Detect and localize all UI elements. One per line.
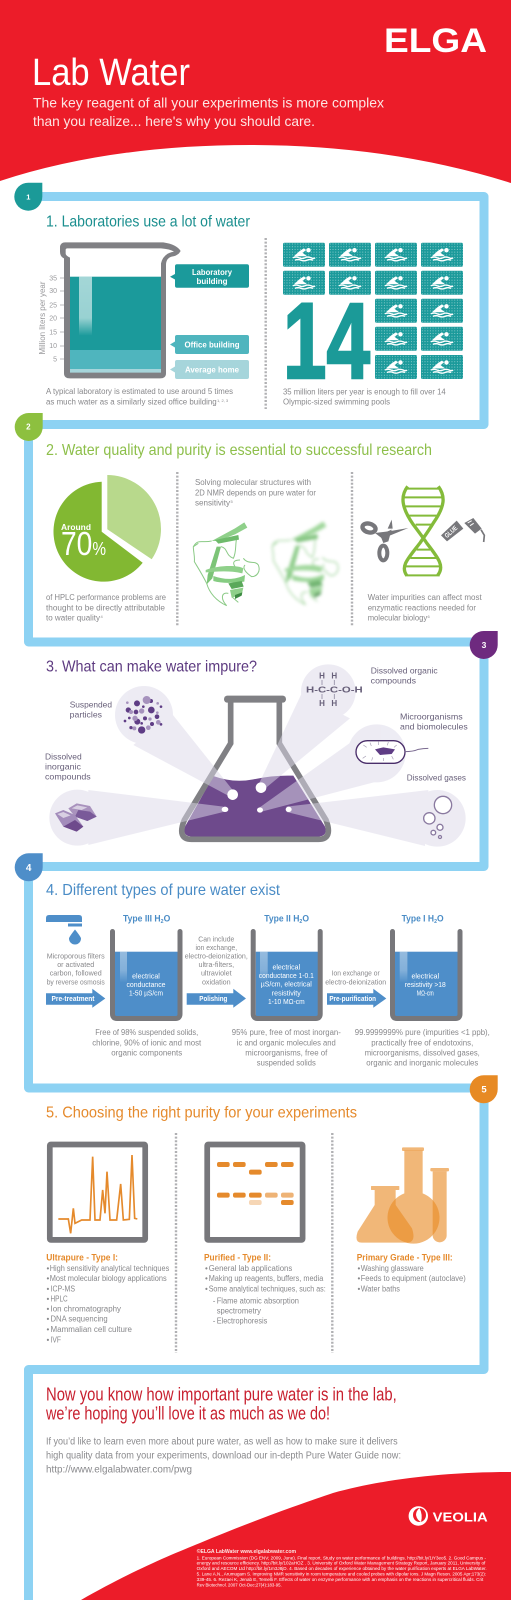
beaker: Type III: 1-50 µS/cm [129, 989, 163, 998]
list: purified: Making up reagents, buffers, media [209, 1274, 324, 1283]
subtitle [33, 95, 384, 129]
arrow: pre-purification [327, 989, 386, 1008]
icon: crystals [55, 803, 97, 832]
caption: HPLC: 4 [100, 614, 104, 619]
list: ultrapure: • [46, 1325, 50, 1334]
caption: Type II: microorganisms, free of [245, 1049, 328, 1058]
list: ultrapure: • [46, 1335, 50, 1344]
beaker: Type II: electrical [272, 963, 300, 972]
closing heading [45, 1385, 397, 1423]
footnotes: 339-45. 6. Rezaei K, Jenab E, Temelli F. Effects of water on enzyme performance with an emphasis on the reactions in supercritical fluids. Crit [197, 1577, 484, 1582]
caption: Type III [92, 1028, 202, 1058]
label: dissolved gases: Dissolved gases [407, 773, 466, 783]
chart: beaker: 25 [49, 302, 57, 310]
text: pre-treatment note: Microporous filters [47, 951, 105, 960]
illustration: sharp protein [193, 522, 259, 606]
closing paragraph: http://www.elgalabwater.com/pwg [46, 1465, 192, 1476]
caption: NMR: 2D NMR depends on pure water for [195, 488, 316, 497]
caption: Type I: organic and inorganic molecules [366, 1058, 478, 1068]
beaker: Type III: conductance [126, 980, 166, 989]
icon: gel electrophoresis [207, 1144, 303, 1240]
list: ultrapure: ICP-MS [50, 1284, 75, 1293]
callout: laboratory building [170, 264, 249, 288]
label: suspended particles: particles [70, 710, 102, 720]
caption: Type II [232, 1028, 341, 1068]
arrow: pre-treatment: Pre-treatment [52, 994, 95, 1003]
text: polishing note: electro-deionization, [185, 951, 248, 960]
list: ultrapure: • [46, 1315, 50, 1324]
icon: chemical formula: H [331, 699, 337, 708]
big number 14: 14 [283, 280, 370, 401]
header: red banner [0, 0, 511, 183]
caption: pools: Olympic-sized swimming pools [283, 398, 390, 407]
list: purified: - [213, 1296, 216, 1305]
caption: NMR [195, 478, 316, 508]
beaker: Type III [112, 914, 180, 1018]
label: microorganisms: and biomolecules [400, 721, 468, 731]
badge 4 [15, 853, 43, 881]
beaker: Type II: Type II H [264, 914, 301, 924]
text: polishing note [185, 934, 248, 986]
caption: Type II: ic and organic molecules and [237, 1038, 336, 1047]
text: polishing note: ultra-filters, [198, 960, 234, 969]
icon: chemical formula: H [319, 671, 325, 680]
panel: closing message [45, 1385, 401, 1476]
caption: HPLC: thought to be directly attributable [46, 603, 166, 612]
list: ultrapure: • [46, 1305, 50, 1314]
icon: DNA with scissors and glue [361, 486, 484, 575]
closing heading: Now you know how important pure water is in the lab, [46, 1385, 397, 1405]
caption: Type III: organic components [111, 1049, 182, 1058]
list: purified: Flame atomic absorption [217, 1296, 299, 1305]
icon: bacterium [356, 741, 428, 763]
footnotes [197, 1548, 487, 1588]
caption: Type I: 99.9999999% pure (impurities <1 ppb), [355, 1028, 490, 1037]
beaker: Type II: resistivity [272, 988, 301, 997]
logo: ELGA: ELGA [384, 22, 487, 60]
icon: bubbles [424, 796, 452, 838]
pie chart: 70%: 70% [61, 525, 106, 562]
list: ultrapure: • [46, 1294, 50, 1303]
beaker: Type I [392, 914, 460, 1018]
footnotes: 5. Lane A.N., Arumugam S. Improving NMR sensitivity in room temperature and cooled probes with dipolar ions. J Magn Reson. 2005 Apr;173(2): [197, 1572, 486, 1577]
text: polishing note: oxidation [202, 977, 231, 986]
text: pre-purification note [325, 969, 386, 986]
caption: enzymatic: Water impurities can affect most [368, 593, 482, 602]
beaker: Type II: 2 [299, 919, 302, 925]
label: suspended particles [70, 699, 112, 720]
badge 5 [470, 1075, 498, 1103]
list: purified: • [205, 1274, 208, 1283]
arrow: polishing: Polishing [199, 994, 228, 1003]
chart: beaker [38, 242, 181, 378]
text: pre-treatment note: carbon, followed [50, 969, 102, 978]
caption: lab usage: 1, 2, 3 [217, 398, 229, 403]
caption: Type I: microorganisms, dissolved gases, [365, 1049, 480, 1058]
beaker: Type I: resistivity >18 [405, 980, 446, 989]
beaker: Type II: 1-10 MΩ-cm [268, 997, 305, 1006]
list: primary grade: • [358, 1284, 360, 1293]
list: primary grade: Water baths [361, 1284, 400, 1293]
panel: section 2 [46, 442, 484, 626]
badge 2 [15, 413, 43, 441]
chart: beaker: 35 [49, 276, 57, 282]
logo: Veolia: VEOLIA [433, 1510, 488, 1525]
callout: laboratory building: building [196, 277, 228, 286]
caption: Type III: Free of 98% suspended solids, [95, 1028, 198, 1037]
footnotes: ©ELGA LabWater www.elgalabwater.com [197, 1548, 296, 1555]
beaker: Type II: conductance 1-0.1 [259, 971, 314, 980]
list: primary grade: Washing glassware [361, 1264, 424, 1273]
caption: pools: 35 million liters per year is enough to fill over 14 [283, 387, 446, 396]
badge 1 [14, 183, 42, 211]
chart: beaker: 10 [49, 343, 57, 350]
list: purified: • [205, 1284, 208, 1293]
list: purified: • [205, 1264, 208, 1273]
label: microorganisms: Microorganisms [400, 711, 463, 721]
callout: office building: Office building [184, 340, 240, 349]
badge 4: 4 [26, 863, 32, 874]
footnotes: 1. European Commission (DG ENV; 2009, June). Final report. Study on water performance of buildings. http://bit.ly/1iY3eo5. 2. Good Campus - [197, 1555, 487, 1560]
caption: lab usage [46, 387, 233, 406]
beaker: Type III: 2 [161, 919, 164, 925]
subtitle: than you realize... here's why you should care. [33, 113, 315, 129]
icon: chemical formula: H [319, 699, 325, 708]
list: ultrapure: IVF [50, 1335, 61, 1344]
list: ultrapure: • [46, 1284, 50, 1293]
heading 4: 4. Different types of pure water exist [46, 882, 281, 899]
caption: lab usage: as much water as a similarly sized office building [46, 397, 217, 406]
icon: tap [46, 915, 82, 944]
list: ultrapure: High sensitivity analytical techniques [50, 1264, 169, 1273]
pie chart: 70%: Around [61, 522, 91, 532]
subtitle: The key reagent of all your experiments is more complex [33, 95, 384, 111]
illustration: flask with beams [49, 664, 466, 847]
footnotes: energy and resource efficiency. http://bit.ly/102aHOZ . 3. University of Oxford Water Management Strategy Report, January 2011, University of [197, 1561, 486, 1566]
label: organic compounds: Dissolved organic [371, 665, 438, 675]
footnotes: Oxford and AECOM Ltd http://bit.ly/1m3J8jD. 4. Based on decades of experience obtained by the water purification experts at ELGA LabWater. [197, 1566, 487, 1571]
list: ultrapure: Ultrapure - Type I: [46, 1253, 118, 1263]
caption: Type I [355, 1028, 490, 1068]
list: purified: - [213, 1317, 216, 1326]
logo: Veolia [409, 1506, 488, 1526]
frame: light blue connector [28, 196, 484, 1600]
beaker: Type I: MΩ-cm [417, 989, 434, 998]
arrow: pre-purification: Pre-purification [329, 994, 376, 1003]
text: pre-treatment note: or activated [57, 960, 94, 969]
icon: glassware [356, 1147, 449, 1244]
beaker: Type I: Type I H [402, 914, 436, 924]
text: polishing note: Can include [198, 934, 234, 943]
list: primary grade: Primary Grade - Type III: [357, 1253, 453, 1263]
badge 1: 1 [26, 192, 30, 202]
caption: HPLC [46, 593, 167, 623]
icon: suspended particles [124, 696, 162, 733]
label: organic compounds [371, 665, 438, 685]
text: pre-treatment note: by reverse osmosis [47, 977, 105, 986]
arrow: pre-treatment [46, 989, 105, 1008]
closing paragraph: If you’d like to learn even more about pure water, as well as how to make sure it delivers [46, 1436, 398, 1447]
list: purified [204, 1253, 326, 1326]
icon: DNA with scissors and glue: GLUE [444, 525, 460, 540]
caption: NMR: Solving molecular structures with [195, 478, 311, 487]
caption: HPLC: of HPLC performance problems are [46, 593, 167, 602]
caption: enzymatic: enzymatic reactions needed for [368, 603, 476, 612]
footnotes: Rev Biotechnol. 2007 Oct-Dec;27(4):183-95. [197, 1583, 282, 1588]
caption: NMR: 5 [230, 499, 234, 504]
arrow: polishing [187, 989, 246, 1008]
caption: enzymatic: molecular biology [368, 614, 427, 623]
beaker: Type II [253, 914, 320, 1018]
callout: average home: Average home [185, 366, 240, 375]
badge 2: 2 [26, 422, 31, 432]
list: ultrapure: DNA sequencing [50, 1315, 108, 1324]
caption: Type III: chlorine, 90% of ionic and most [92, 1038, 202, 1047]
callout: average home [170, 360, 249, 379]
pie chart: 70% [53, 475, 161, 582]
list: purified: General lab applications [209, 1264, 292, 1273]
closing heading: we’re hoping you’ll love it as much as we do! [45, 1403, 330, 1423]
caption: Type II: suspended solids [257, 1058, 316, 1068]
label: organic compounds: compounds [371, 675, 416, 685]
list: ultrapure: • [46, 1264, 50, 1273]
closing paragraph: high quality data from your experiments, download our in-depth Pure Water Guide now: [46, 1451, 401, 1462]
chart: beaker: Million liters per year [38, 281, 47, 354]
caption: enzymatic: 6 [428, 614, 430, 619]
panel: section 3 [45, 659, 468, 847]
beaker: Type III: O [164, 914, 170, 924]
icon: chemical formula [306, 671, 363, 708]
text: pre-treatment note [47, 951, 105, 986]
list: purified: Purified - Type II: [204, 1253, 271, 1263]
icon: chemical formula: H [331, 671, 337, 680]
beaker: Type III: Type III H [123, 914, 162, 924]
text: pre-purification note: electro-deionization [325, 977, 386, 986]
label: inorganic compounds [45, 751, 91, 781]
beaker: Type I: O [437, 914, 444, 924]
chart: beaker: 30 [49, 288, 57, 295]
list: ultrapure: HPLC [50, 1294, 68, 1303]
chart: beaker: 15 [49, 330, 57, 336]
beaker: Type I: 2 [434, 919, 437, 925]
icons: swimming pools [283, 243, 463, 379]
label: inorganic compounds: inorganic [45, 762, 82, 772]
closing paragraph [46, 1436, 401, 1476]
list: ultrapure [46, 1253, 169, 1344]
callout: laboratory building: Laboratory [192, 268, 233, 277]
label: suspended particles: Suspended [70, 699, 112, 709]
heading 1: 1. Laboratories use a lot of water [46, 214, 251, 231]
badge 3: 3 [482, 640, 487, 650]
footer: red banner [81, 1472, 511, 1600]
chart: beaker: 5 [53, 356, 57, 364]
list: primary grade: • [358, 1274, 360, 1283]
list: purified: Electrophoresis [217, 1317, 267, 1326]
heading 5: 5. Choosing the right purity for your experiments [46, 1105, 357, 1122]
caption: NMR: sensitivity [195, 498, 230, 508]
panel: section 4 [46, 882, 490, 1068]
icon: chromatogram [50, 1144, 145, 1240]
list: ultrapure: • [46, 1274, 50, 1283]
beaker: Type I: electrical [411, 971, 439, 980]
panel: section 1 [38, 214, 463, 409]
illustration: blurred protein [272, 521, 338, 605]
panel: section 5 [46, 1105, 466, 1353]
heading 3: 3. What can make water impure? [46, 659, 257, 676]
caption: Type I: practically free of endotoxins, [371, 1038, 473, 1047]
heading 2: 2. Water quality and purity is essential to successful research [46, 442, 432, 459]
list: primary grade [357, 1253, 466, 1293]
list: primary grade: • [358, 1264, 360, 1273]
beaker: Type III: electrical [132, 971, 160, 980]
label: microorganisms [400, 711, 468, 731]
caption: HPLC: to water quality [46, 614, 100, 623]
list: primary grade: Feeds to equipment (autoclave) [361, 1274, 466, 1283]
badge 3 [470, 631, 498, 659]
caption: lab usage: A typical laboratory is estimated to use around 5 times [46, 387, 233, 396]
list: purified: Some analytical techniques, such as: [209, 1284, 326, 1293]
title: Lab Water [32, 52, 190, 94]
label: inorganic compounds: compounds [45, 771, 91, 781]
list: ultrapure: Mammalian cell culture [50, 1325, 133, 1334]
badge 5: 5 [481, 1084, 487, 1096]
callout: office building [170, 335, 249, 354]
list: ultrapure: Most molecular biology applications [50, 1274, 167, 1283]
beaker: Type II: O [302, 914, 309, 924]
beaker: Type II: µS/cm, electrical [261, 980, 312, 989]
list: ultrapure: Ion chromatography [50, 1305, 121, 1314]
text: polishing note: ion exchange, [195, 943, 237, 952]
chart: beaker: 20 [49, 316, 57, 322]
text: pre-purification note: Ion exchange or [332, 969, 380, 978]
caption: enzymatic [368, 593, 482, 623]
list: purified: spectrometry [217, 1307, 261, 1316]
caption: pools [283, 387, 446, 407]
caption: Type II: 95% pure, free of most inorgan- [232, 1028, 341, 1037]
label: inorganic compounds: Dissolved [45, 751, 82, 761]
icon: chemical formula: H-C-C-O-H [306, 685, 363, 694]
text: polishing note: ultraviolet [201, 969, 233, 978]
